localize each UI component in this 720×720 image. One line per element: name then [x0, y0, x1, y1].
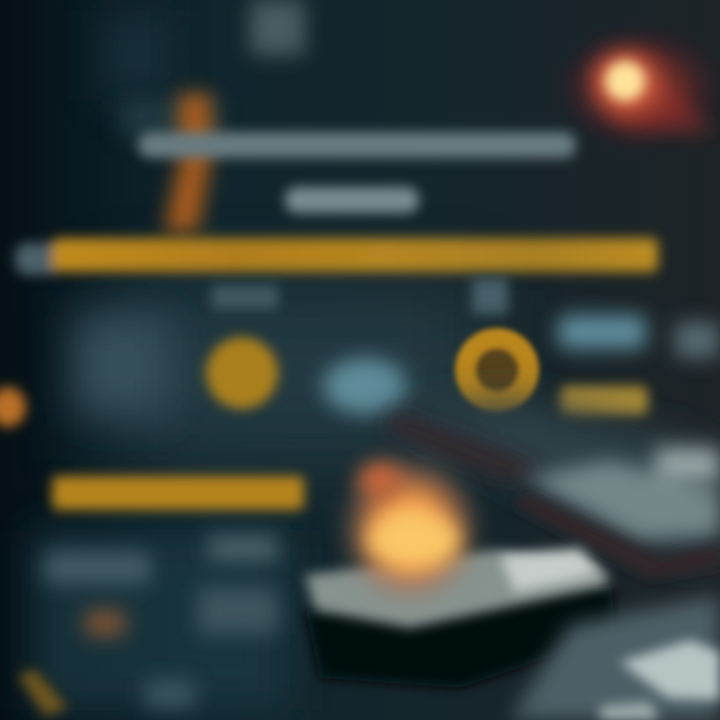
- lower right paper stack: [385, 322, 720, 578]
- left lower text block: [45, 536, 278, 708]
- left panel: [75, 315, 170, 415]
- glowing red light: [550, 20, 720, 156]
- yellow header banner: [15, 238, 658, 275]
- bottom right papers: [510, 595, 720, 720]
- title: [138, 132, 576, 213]
- orange side marker: [0, 387, 26, 427]
- yellow ring icon: [455, 328, 539, 412]
- blue label: [558, 315, 646, 349]
- fire glow: [338, 454, 482, 606]
- orange vertical streak: [164, 92, 212, 232]
- dark slab: [305, 548, 615, 688]
- orange corner mark: [18, 670, 68, 716]
- yellow circle: [206, 337, 278, 409]
- yellow subheading banner: [52, 476, 304, 510]
- blue circle: [323, 358, 407, 414]
- column labels: [212, 278, 508, 314]
- yellow label: [560, 386, 648, 416]
